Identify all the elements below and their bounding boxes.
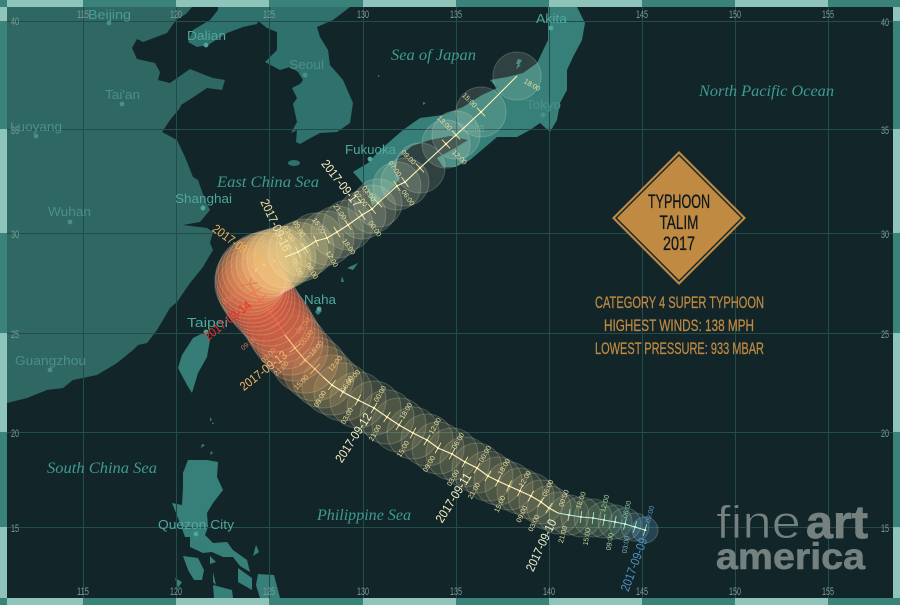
- sign title text: 2017: [663, 234, 695, 255]
- track time labels: 21:00: [273, 360, 291, 378]
- land: Philippine islands: [175, 545, 280, 598]
- land: Jeju: [288, 160, 300, 166]
- sign title text: [648, 192, 710, 255]
- track time labels: 21:00: [221, 291, 240, 306]
- track time labels: 06:00: [346, 369, 362, 387]
- grid labels: 120: [170, 9, 182, 21]
- watermark: [716, 496, 868, 577]
- track time labels: 09:00: [313, 390, 328, 409]
- storm statistics: HIGHEST WINDS: 138 MPH: [604, 316, 754, 335]
- grid labels: 40: [881, 17, 889, 29]
- city labels: Akita: [536, 11, 568, 26]
- city labels: [10, 7, 568, 536]
- track date labels: 2017-09-16: [257, 197, 294, 254]
- track time labels: 21:00: [558, 525, 569, 544]
- storm statistics: LOWEST PRESSURE: 933 MBAR: [595, 339, 764, 358]
- track date labels: 2017-09-15: [210, 222, 263, 266]
- track time labels: 03:00: [340, 407, 355, 426]
- track time labels: 18:00: [575, 491, 588, 510]
- city labels: Dalian: [187, 28, 226, 43]
- grid labels: 35: [11, 125, 19, 137]
- track time labels: 15:00: [396, 440, 411, 459]
- track time labels: 15:00: [494, 495, 508, 514]
- sea labels: North Pacific Ocean: [698, 83, 834, 100]
- track time labels: 00:00: [366, 220, 382, 238]
- track date labels: [201, 157, 650, 593]
- city labels: Naha: [304, 292, 337, 307]
- land: Taiwan: [178, 332, 210, 393]
- grid labels: 115: [77, 586, 89, 598]
- track date labels: 2017-09-11: [433, 470, 474, 525]
- watermark: america: [716, 536, 865, 577]
- storm statistics: CATEGORY 4 SUPER TYPHOON: [595, 293, 764, 312]
- city labels: Wuhan: [48, 204, 91, 219]
- grid labels: 20: [11, 428, 19, 440]
- grid labels: 125: [263, 586, 275, 598]
- track time labels: 06:00: [542, 479, 556, 498]
- track time labels: 18:00: [497, 458, 512, 477]
- track time labels: 18:00: [522, 78, 541, 93]
- track date labels: 2017-09-17: [318, 157, 364, 210]
- track time labels: 12:00: [324, 250, 339, 269]
- track time labels: 00:00: [289, 258, 303, 277]
- city labels: Tokyo: [526, 97, 561, 112]
- land: Luzon: [172, 460, 250, 572]
- track time labels: 09:00: [606, 532, 616, 551]
- storm statistics: [595, 293, 764, 358]
- track time labels: 12:00: [328, 355, 344, 373]
- sea labels: Sea of Japan: [391, 47, 476, 64]
- grid labels: 15: [11, 523, 19, 535]
- track date labels: 2017-09-14: [201, 298, 254, 344]
- track time labels: 07:00: [386, 160, 402, 178]
- track time labels: 15:00: [293, 374, 311, 392]
- grid labels: 130: [357, 9, 369, 21]
- track time labels: 13:00: [435, 115, 453, 133]
- grid labels: 30: [881, 229, 889, 241]
- grid labels: 30: [11, 229, 19, 241]
- track time labels: 00:00: [299, 329, 315, 347]
- city labels: Taipei: [187, 315, 228, 330]
- city labels: Fukuoka: [345, 142, 397, 157]
- track time labels: 09:00: [291, 220, 306, 239]
- track time labels: 06:00: [451, 432, 466, 451]
- track time labels: 03:00: [281, 225, 296, 244]
- track time labels: 09:00: [240, 335, 258, 352]
- sea labels: East China Sea: [216, 174, 319, 191]
- land: Japan: [353, 7, 585, 206]
- city labels: Shanghai: [175, 191, 232, 206]
- warning sign: typhoon title: [612, 151, 746, 285]
- track date labels: 2017-09-09: [618, 536, 650, 593]
- track time labels: 09:00: [399, 149, 417, 167]
- track time labels: [221, 78, 656, 554]
- grid labels: 40: [11, 16, 19, 28]
- track time labels: 12:00: [258, 240, 275, 258]
- grid labels: 135: [450, 9, 462, 21]
- track time labels: 09:00: [422, 455, 437, 474]
- grid labels: 145: [636, 9, 648, 21]
- city labels: Osaka: [458, 120, 485, 135]
- grid labels: 155: [822, 9, 834, 21]
- sign title text: TYPHOON: [648, 192, 710, 213]
- track time labels: 12:00: [600, 494, 611, 513]
- track time labels: 03:00: [260, 347, 278, 365]
- track date labels: 2017-09-13: [237, 348, 290, 394]
- grid labels: 145: [636, 586, 648, 598]
- track line with time ticks: [250, 76, 645, 530]
- track time labels: 03:00: [622, 535, 632, 554]
- track time labels: 06:00: [340, 375, 355, 394]
- track time labels: 15:00: [310, 217, 326, 235]
- grid labels: 125: [263, 9, 275, 21]
- grid labels: 25: [881, 329, 889, 341]
- grid labels: 15: [881, 523, 889, 535]
- track time labels: 03:00: [446, 469, 461, 488]
- land: small islands: [201, 59, 522, 455]
- track time labels: 12:00: [428, 417, 443, 436]
- track time labels: 03:00: [360, 185, 376, 203]
- track date labels: 2017-09-12: [333, 411, 375, 465]
- land: China: [7, 7, 225, 403]
- land masses: [7, 7, 585, 598]
- track time labels: 06:00: [296, 317, 312, 335]
- grid labels: 20: [881, 428, 889, 440]
- grid labels: 130: [357, 586, 369, 598]
- grid labels: 140: [543, 586, 555, 598]
- city labels: Quezon City: [158, 517, 235, 532]
- track time labels: 00:00: [478, 445, 493, 464]
- grid labels: 150: [729, 586, 741, 598]
- grid labels: 155: [822, 586, 834, 598]
- track time labels: 06:00: [304, 262, 319, 281]
- track date labels: 2017-09-10: [523, 517, 560, 574]
- grid labels: 120: [170, 586, 182, 598]
- track time labels: 03:00: [528, 514, 542, 533]
- city labels: Luoyang: [10, 119, 62, 134]
- city labels: Seoul: [289, 57, 324, 72]
- grid labels: 135: [450, 586, 462, 598]
- city labels: Tai'an: [105, 87, 140, 102]
- land: Liaodong and Korea: [188, 7, 353, 144]
- watermark: art: [806, 496, 868, 548]
- sea labels: Philippine Sea: [316, 507, 411, 524]
- track time labels: 09:00: [516, 505, 530, 524]
- track time labels: 02:00: [352, 190, 368, 208]
- watermark: fine: [716, 496, 801, 548]
- sign title text: TALIM: [660, 213, 698, 234]
- grid labels: 25: [11, 329, 19, 341]
- track time labels: 12:00: [518, 470, 533, 489]
- track time labels: 00:00: [373, 385, 388, 404]
- track time labels: 21:00: [368, 424, 383, 443]
- sea labels: South China Sea: [47, 460, 157, 477]
- city labels: Beijing: [88, 7, 131, 22]
- track time labels: 00:00: [558, 489, 571, 508]
- track time labels: 18:00: [340, 238, 356, 256]
- track time labels: 21:00: [331, 203, 347, 221]
- track time labels: 06:00: [399, 189, 415, 207]
- track time labels: 21:00: [467, 482, 482, 501]
- track time labels: 06:00: [622, 500, 633, 519]
- track time labels: 09:00: [645, 505, 656, 524]
- sea labels: [47, 47, 834, 524]
- track time labels: 12:00: [450, 149, 468, 167]
- track time labels: 06:00: [240, 253, 258, 269]
- track time labels: 18:00: [309, 340, 325, 358]
- track time labels: 15:00: [583, 527, 593, 546]
- track time labels: 18:00: [399, 402, 414, 421]
- grid labels: 35: [881, 125, 889, 137]
- track time labels: 15:00: [460, 92, 478, 110]
- city labels: Guangzhou: [15, 353, 86, 368]
- grid labels: 150: [729, 9, 741, 21]
- grid labels: 115: [77, 9, 89, 21]
- typhoon track wind circles: [215, 52, 658, 543]
